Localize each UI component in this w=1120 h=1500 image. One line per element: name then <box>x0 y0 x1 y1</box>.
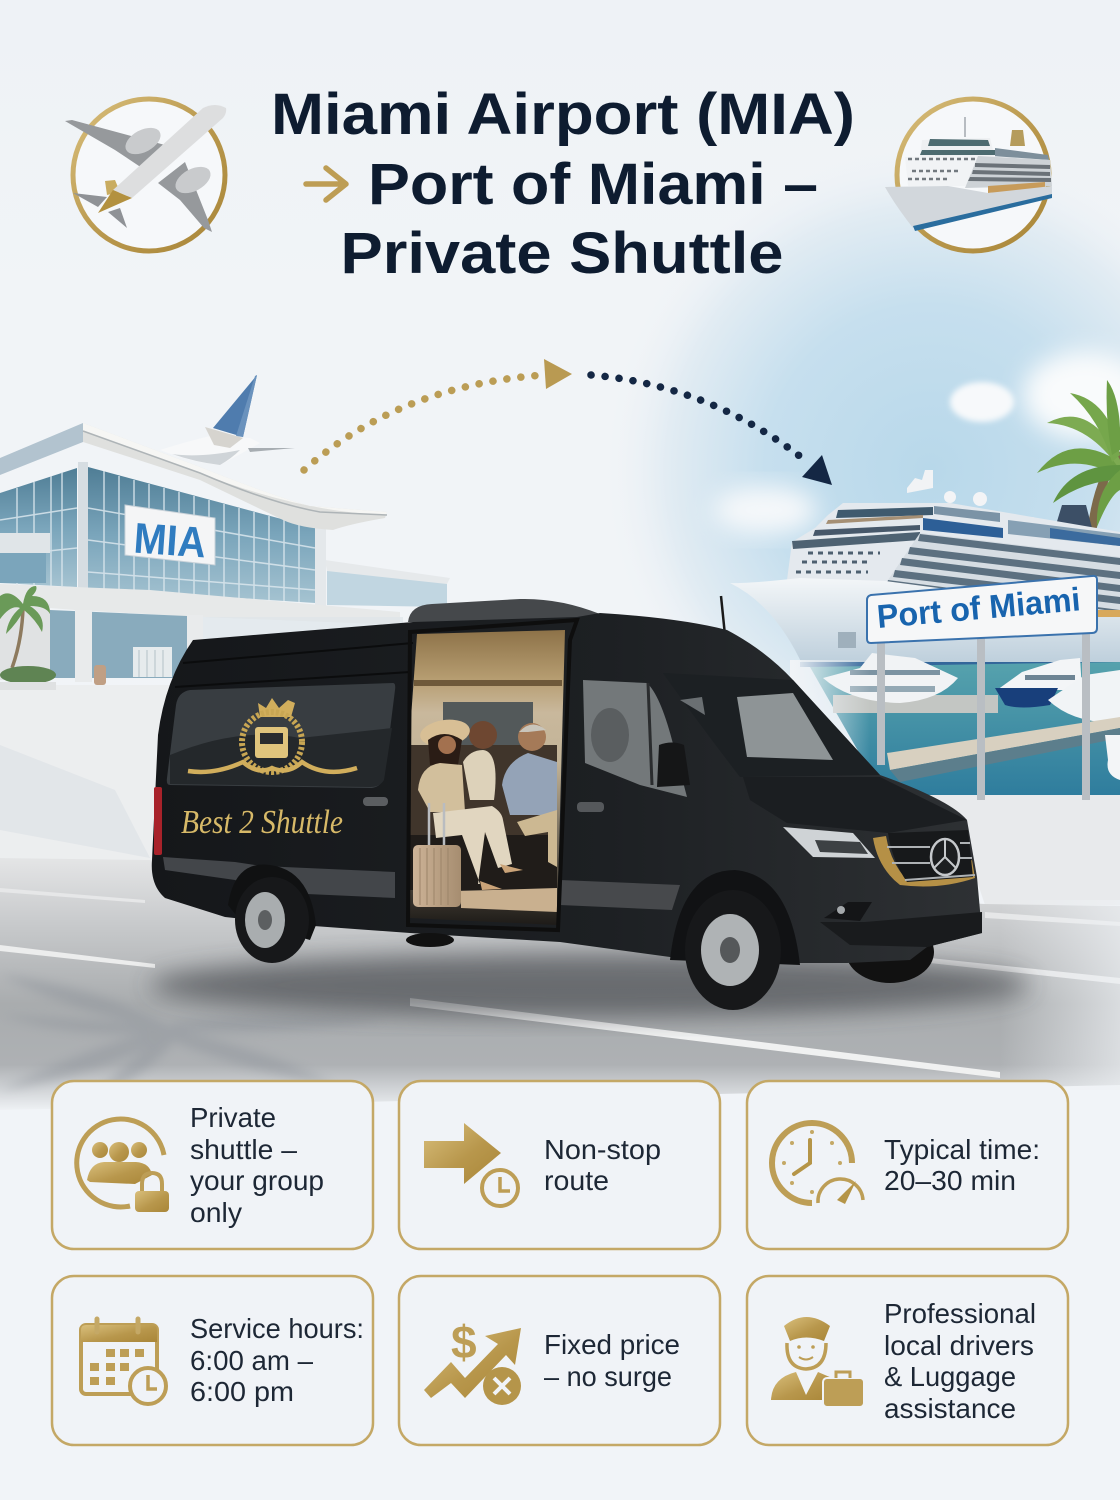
icon: dollar, rising arrow and cross <box>424 1316 521 1405</box>
dotted route arrow from airport <box>304 359 572 470</box>
dotted route arrow to port <box>591 375 832 485</box>
airplane above terminal <box>160 375 295 465</box>
MIA sign: MIA <box>132 515 208 567</box>
lower body trim <box>163 857 395 898</box>
door opening interior <box>408 630 565 925</box>
crown and wreath logo <box>188 698 357 772</box>
panel: professional drivers: assistance <box>884 1393 1016 1424</box>
rear window <box>167 683 395 788</box>
title <box>271 82 855 286</box>
roof pod <box>408 599 600 622</box>
icon: group with padlock <box>77 1119 169 1212</box>
road <box>0 858 1120 1110</box>
title: Port of Miami – <box>368 152 818 217</box>
wing mirror <box>657 742 690 787</box>
passengers <box>418 717 557 890</box>
gold grille surround <box>873 836 975 886</box>
Best 2 Shuttle lettering: Best 2 Shuttle <box>181 804 343 841</box>
icon: dollar, rising arrow and cross: $ <box>451 1316 477 1368</box>
antenna <box>721 596 727 655</box>
rear door handle <box>363 797 388 806</box>
soft fade behind van at port <box>790 660 870 800</box>
front door handle <box>577 802 604 812</box>
panel: professional drivers: Professional <box>884 1298 1036 1329</box>
title arrow <box>306 168 346 200</box>
icon: arrow with clock <box>424 1123 518 1206</box>
rear wheel <box>228 864 316 963</box>
door step <box>461 888 557 912</box>
panel: service hours: 6:00 pm <box>190 1376 294 1407</box>
panel: private shuttle: Private <box>190 1102 276 1133</box>
panel: non-stop route: Non-stop <box>544 1134 661 1165</box>
fog light <box>824 902 872 921</box>
panel: service hours <box>52 1276 373 1445</box>
van shadow <box>150 953 1030 1017</box>
star badge <box>931 839 959 875</box>
panel: typical time <box>747 1081 1068 1249</box>
centre wheel far side <box>406 933 454 947</box>
panel: non-stop route: route <box>544 1165 609 1196</box>
panel: professional drivers: & Luggage <box>884 1361 1016 1392</box>
front door window <box>583 680 687 797</box>
panel: private shuttle: shuttle – <box>190 1134 298 1165</box>
panel: typical time: Typical time: <box>884 1134 1040 1165</box>
sky and clouds <box>590 130 1120 810</box>
panel: professional drivers <box>747 1276 1068 1445</box>
hood <box>743 777 967 833</box>
windshield <box>663 673 880 777</box>
Port of Miami sign <box>867 576 1097 800</box>
panel: fixed price: – no surge <box>544 1361 672 1392</box>
icon: clock and speedometer <box>772 1123 863 1204</box>
palm tree <box>0 586 56 690</box>
sliding door edge <box>408 620 577 930</box>
black shuttle van <box>152 596 982 1010</box>
body <box>152 613 982 963</box>
title: Miami Airport (MIA) <box>271 82 855 147</box>
panel: professional drivers: local drivers <box>884 1330 1034 1361</box>
man with glasses <box>518 723 546 751</box>
headlight <box>783 827 875 858</box>
icon: calendar with clock <box>81 1319 166 1404</box>
icon: cruise ship in gold ring <box>885 99 1052 251</box>
scene: MIA airport terminal <box>0 423 460 860</box>
panel: private shuttle: only <box>190 1197 242 1228</box>
front wheel <box>670 870 800 1010</box>
scene: harbour water, yachts and pier <box>800 653 1120 905</box>
panel seams <box>175 643 413 687</box>
icon: driver with luggage <box>771 1317 864 1407</box>
palm shadow on road <box>0 975 385 1100</box>
panel: typical time: 20–30 min <box>884 1165 1016 1196</box>
woman with hat <box>418 717 472 749</box>
panel: non-stop route <box>399 1081 720 1249</box>
panel: private shuttle <box>52 1081 373 1249</box>
front bumper <box>820 912 982 947</box>
scene: cruise ship <box>730 470 1120 667</box>
icon: airplane in gold ring <box>65 99 226 251</box>
tail light <box>154 787 162 855</box>
man in back <box>469 721 497 749</box>
panel: private shuttle: your group <box>190 1165 324 1196</box>
title: Private Shuttle <box>340 221 784 286</box>
rolling suitcase <box>413 803 461 907</box>
panel: fixed price: Fixed price <box>544 1329 680 1360</box>
panel: fixed price <box>399 1276 720 1445</box>
scene: palm tree at port <box>1037 380 1120 530</box>
far front wheel <box>846 921 934 983</box>
panel: service hours: 6:00 am – <box>190 1345 314 1376</box>
Port of Miami sign: Port of Miami <box>875 580 1082 635</box>
panel: service hours: Service hours: <box>190 1313 364 1344</box>
